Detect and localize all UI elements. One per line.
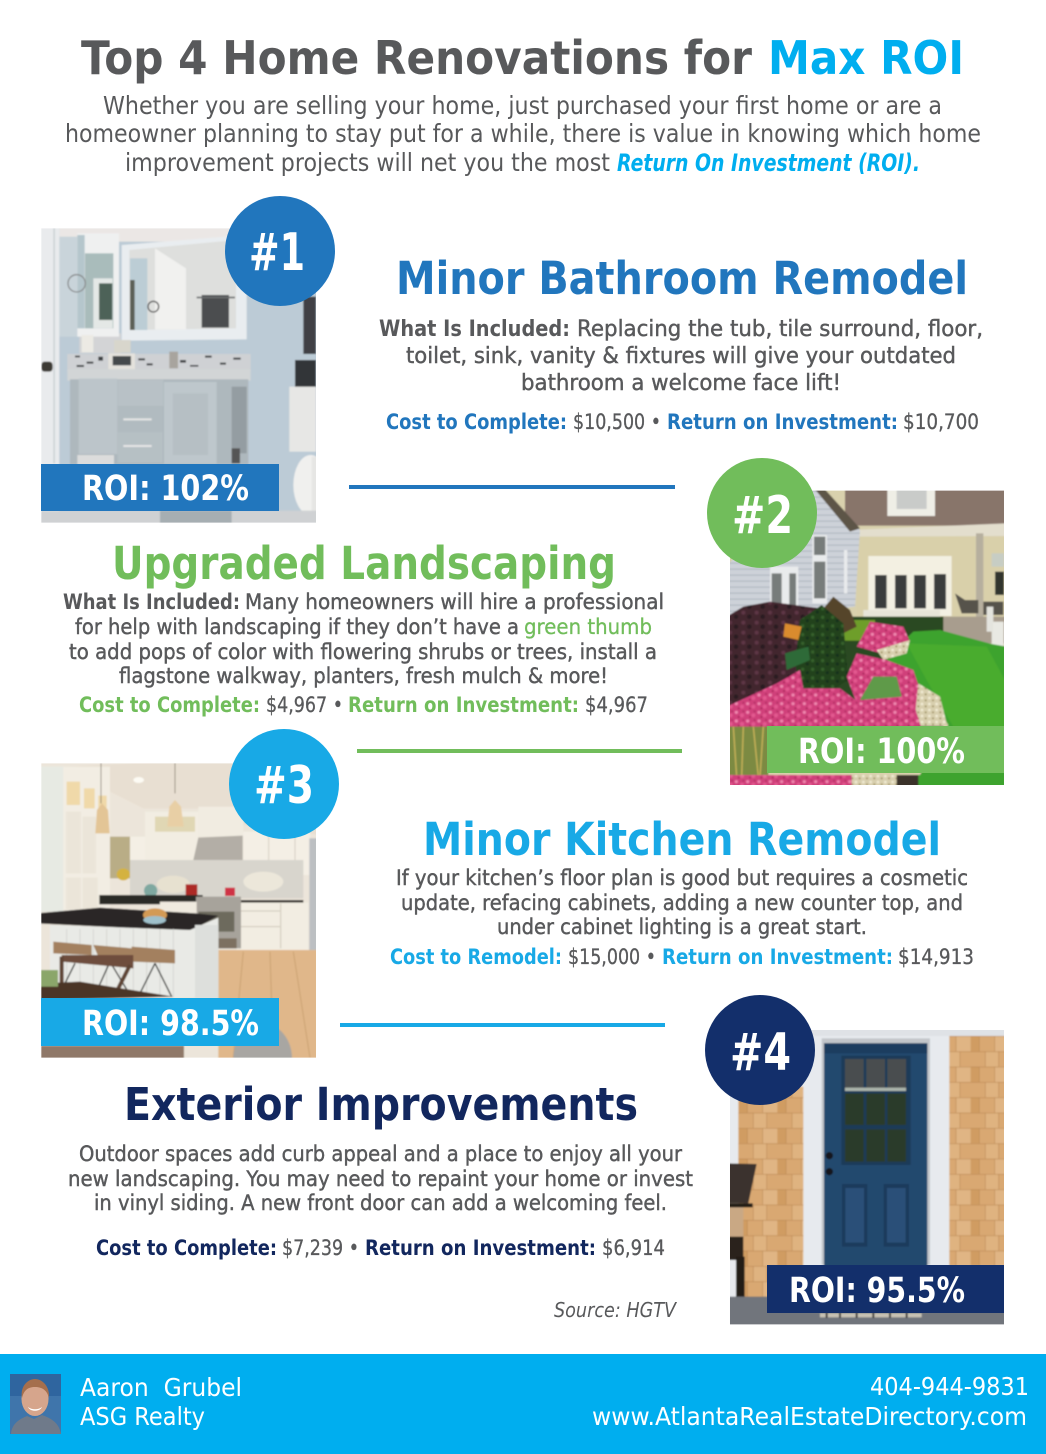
heading: Exterior Improvements: [124, 1078, 638, 1131]
panel: #1 bathroom photo and ROI: [37, 196, 335, 527]
description: [396, 866, 968, 940]
cost and return line: Cost to Remodel:: [390, 945, 562, 969]
panel: #2 landscaping photo and ROI: [707, 458, 1007, 787]
description: [379, 316, 983, 396]
photo: bathroom vanity: [37, 223, 328, 527]
photo: white kitchen: [41, 763, 316, 1058]
cost and return line: [390, 945, 974, 969]
source note: Source: HGTV: [554, 1298, 677, 1322]
rank badge #2: [707, 458, 817, 568]
cost and return line: Return on Investment:: [662, 945, 893, 969]
rank badge #3: #3: [254, 756, 314, 816]
description: green thumb: [524, 615, 652, 640]
rank badge #1: [225, 196, 335, 306]
description: Many homeowners will hire a professional: [245, 590, 664, 615]
panel: #2 Upgraded Landscaping text: [63, 537, 664, 717]
description: in vinyl siding. A new front door can add a welcoming feel.: [94, 1191, 667, 1216]
cost and return line: Cost to Complete:: [79, 693, 260, 717]
cost and return line: $4,967: [585, 693, 648, 717]
intro text: Whether you are selling your home, just purchased your first home or are a: [103, 91, 942, 120]
ROI bar: [41, 464, 279, 511]
description: [68, 1142, 693, 1216]
ROI bar: ROI: 98.5%: [82, 1004, 259, 1044]
title: Top 4 Home Renovations for: [81, 31, 752, 85]
cost and return line: [386, 410, 979, 434]
description: flagstone walkway, planters, fresh mulch & more!: [119, 664, 608, 689]
cost and return line: Return on Investment:: [348, 693, 579, 717]
heading: Minor Bathroom Remodel: [396, 252, 968, 305]
description: update, refacing cabinets, adding a new counter top, and: [401, 891, 963, 916]
title: Max ROI: [768, 31, 964, 85]
description: What Is Included:: [63, 590, 240, 615]
agent name and company: Aaron Grubel: [80, 1373, 242, 1402]
description: bathroom a welcome face lift!: [521, 370, 841, 396]
description: What Is Included:: [379, 316, 570, 342]
cost and return line: $10,500 •: [573, 410, 661, 434]
cost and return line: [79, 693, 648, 717]
agent name and company: ASG Realty: [80, 1402, 205, 1431]
ROI bar: ROI: 100%: [798, 732, 965, 772]
description: Replacing the tub, tile surround, floor,: [577, 316, 983, 342]
panel: #3 kitchen photo and ROI: [41, 729, 339, 1058]
cost and return line: $15,000 •: [568, 945, 656, 969]
description: for help with landscaping if they don’t have a: [75, 615, 519, 640]
heading: Upgraded Landscaping: [112, 537, 616, 590]
cost and return line: Return on Investment:: [365, 1236, 596, 1260]
description: [63, 590, 664, 689]
ROI bar: ROI: 102%: [82, 469, 249, 509]
description: to add pops of color with flowering shrubs or trees, install a: [69, 640, 657, 665]
cost and return line: Return on Investment:: [667, 410, 898, 434]
cost and return line: $6,914: [602, 1236, 665, 1260]
contact details: [592, 1372, 1029, 1431]
photo: landscaped garden: [727, 487, 1007, 787]
description: If your kitchen’s floor plan is good but requires a cosmetic: [396, 866, 968, 891]
intro text: improvement projects will net you the most: [125, 148, 610, 177]
ROI bar: ROI: 95.5%: [789, 1271, 965, 1311]
cost and return line: $7,239 •: [282, 1236, 359, 1260]
rank badge #3: [229, 729, 339, 839]
cost and return line: $14,913: [898, 945, 974, 969]
intro text: [65, 91, 981, 177]
description: toilet, sink, vanity & fixtures will give your outdated: [406, 343, 956, 369]
cost and return line: Cost to Complete:: [96, 1236, 277, 1260]
ROI bar: [41, 998, 279, 1046]
panel: #3 Minor Kitchen Remodel text: [390, 813, 974, 969]
cost and return line: $4,967 •: [266, 693, 343, 717]
rank badge #4: #4: [730, 1023, 791, 1083]
cost and return line: $10,700: [903, 410, 979, 434]
panel: #1 Minor Bathroom Remodel text: [379, 252, 983, 434]
cost and return line: [96, 1236, 665, 1260]
description: under cabinet lighting is a great start.: [497, 915, 867, 940]
cost and return line: Cost to Complete:: [386, 410, 567, 434]
footer bar: [0, 1354, 1046, 1454]
rank badge #1: #1: [249, 223, 305, 283]
intro text: Return On Investment (ROI).: [617, 149, 920, 177]
agent name and company: [80, 1373, 242, 1431]
rank badge #4: [705, 995, 815, 1105]
photo: navy front door: [727, 1027, 1007, 1327]
agent portrait: [10, 1374, 61, 1434]
panel: #4 Exterior Improvements text: [68, 1078, 693, 1322]
contact details: 404-944-9831: [870, 1372, 1029, 1401]
description: new landscaping. You may need to repaint your home or invest: [68, 1167, 693, 1192]
rank badge #2: #2: [732, 486, 793, 546]
heading: Minor Kitchen Remodel: [423, 813, 941, 866]
contact details: www.AtlantaRealEstateDirectory.com: [592, 1402, 1027, 1431]
panel: #4 front door photo and ROI: [705, 995, 1007, 1327]
description: Outdoor spaces add curb appeal and a place to enjoy all your: [79, 1142, 682, 1167]
